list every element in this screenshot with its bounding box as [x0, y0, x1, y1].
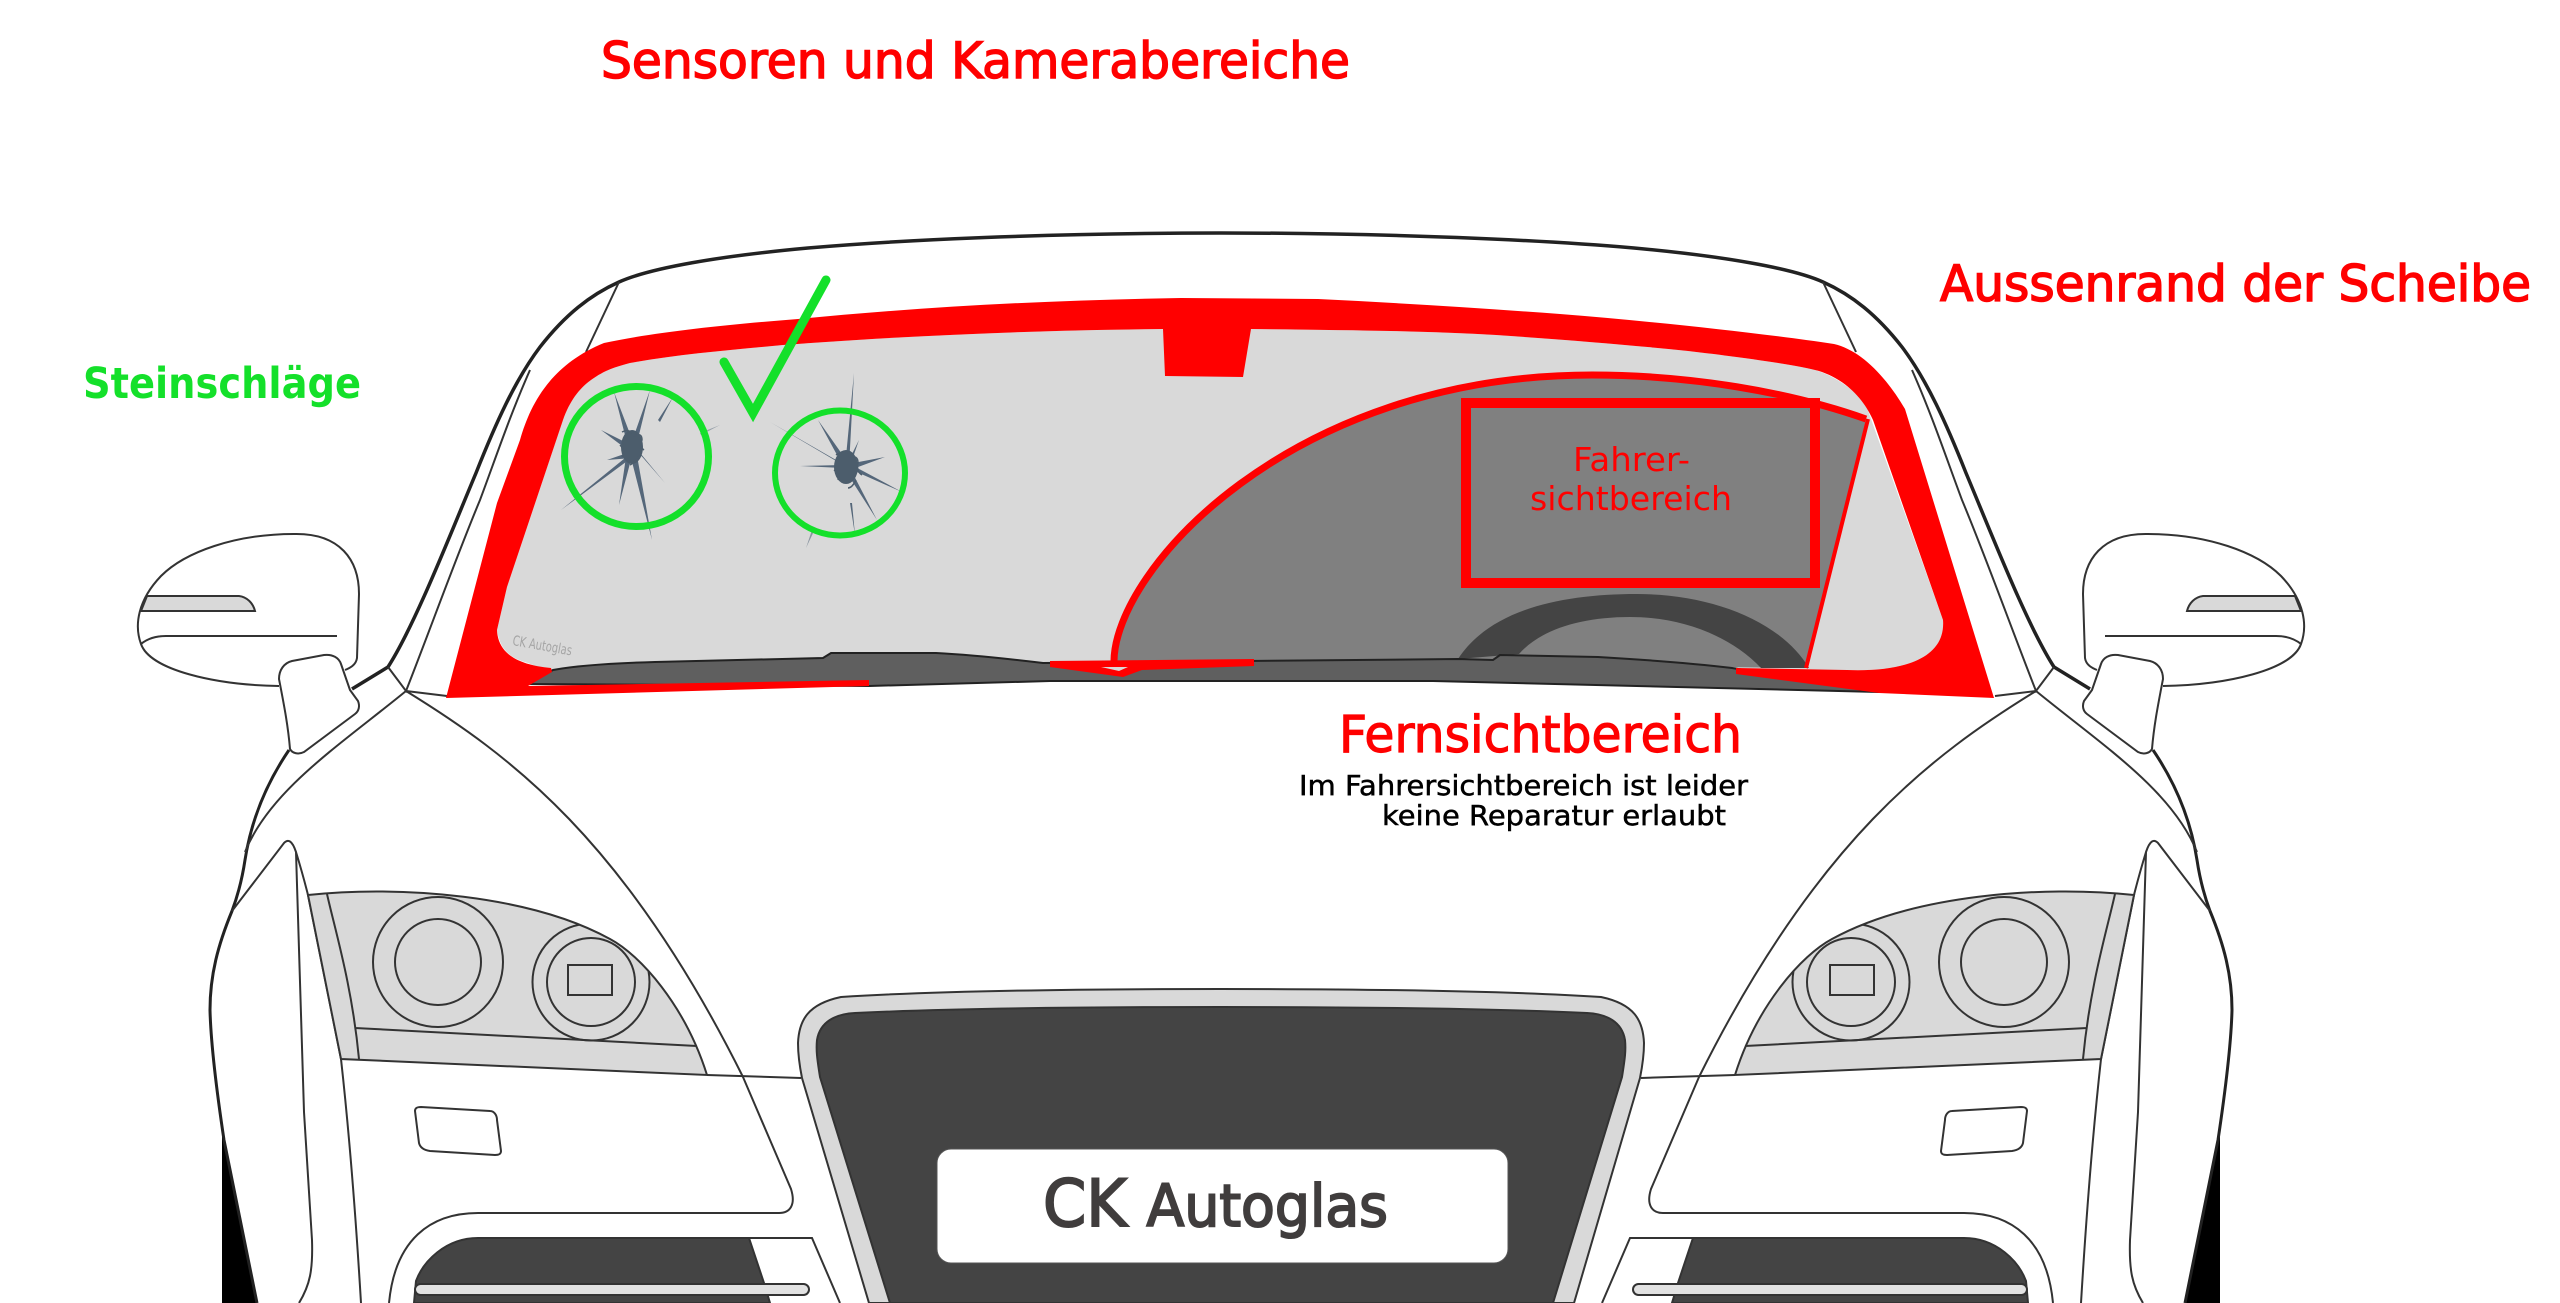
label: driver view: sichtbereich [1530, 479, 1732, 518]
grille frame [798, 989, 1644, 1303]
label: driver view: Fahrer- [1573, 440, 1690, 479]
note text [1299, 769, 1749, 832]
red arc: far vision boundary [1114, 375, 1868, 668]
stone chip left [561, 390, 720, 540]
left car side [138, 233, 1221, 1303]
label: outer edge: Aussenrand der Scheibe [1940, 255, 2531, 313]
driver view rectangle [1466, 403, 1815, 583]
green circle right [775, 410, 905, 536]
watermark: CK Autoglas [511, 633, 573, 659]
driver view area [1114, 375, 1866, 668]
red wedge under arc [1050, 659, 1254, 677]
stone chip right [770, 373, 902, 548]
windshield glass [497, 329, 1943, 672]
label: stone chips: Steinschläge [83, 359, 361, 409]
outer edge of the windshield [446, 298, 1994, 698]
number plate [937, 1149, 1508, 1263]
steering wheel [1458, 594, 1809, 668]
plate text: CK Autoglas [1043, 1167, 1388, 1242]
label: far vision area: Fernsichtbereich [1339, 706, 1742, 765]
note text: keine Reparatur erlaubt [1382, 799, 1726, 832]
grille [798, 989, 1644, 1303]
green check mark [724, 280, 826, 413]
note text: Im Fahrersichtbereich ist leider [1299, 769, 1749, 802]
label: driver view [1530, 440, 1732, 518]
title: Sensoren und Kamerabereiche [601, 32, 1350, 90]
grille opening [817, 1007, 1625, 1303]
right car side [1221, 233, 2304, 1303]
green circle left [564, 386, 708, 526]
wiper cowl [527, 653, 1879, 692]
